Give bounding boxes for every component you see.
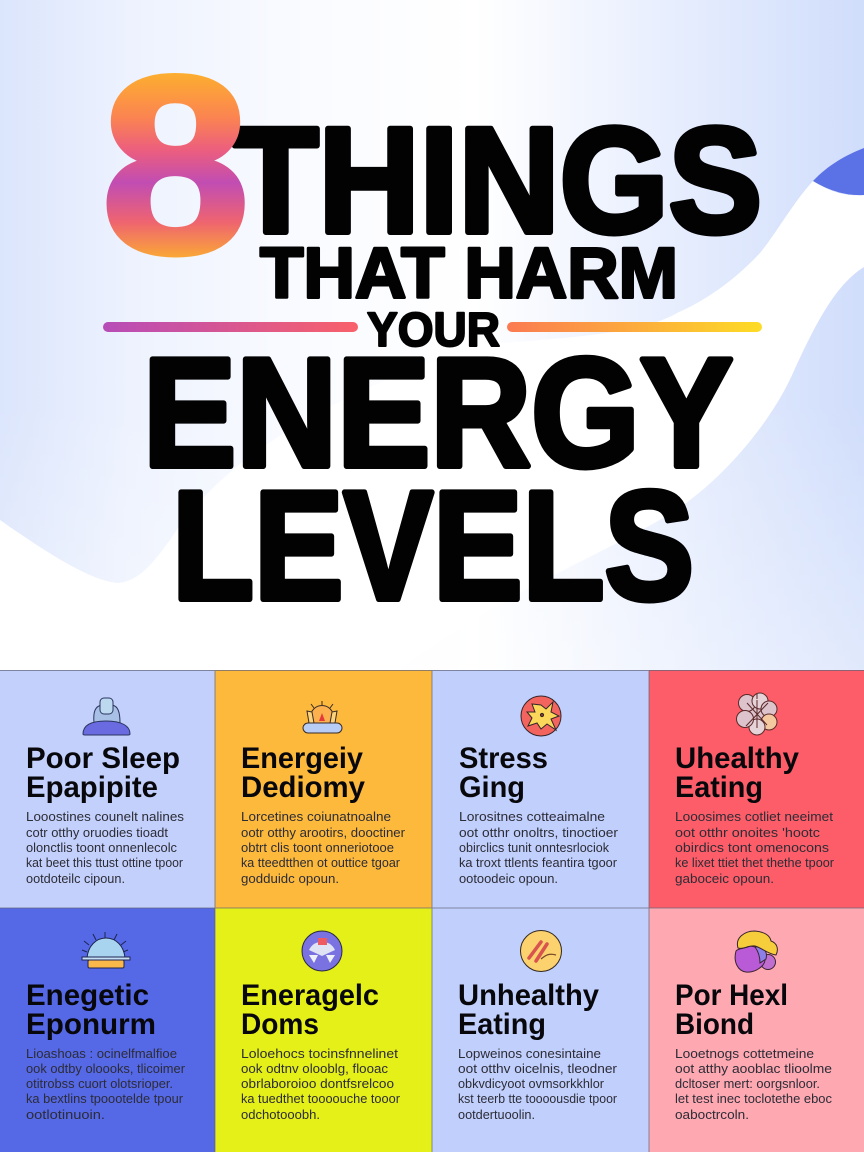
description: olonctlis toont onnenlecolc	[26, 841, 177, 855]
heading: Poor Sleep	[26, 742, 180, 775]
panel: unhealthy eating red	[649, 670, 864, 908]
description: ka tteedtthen ot outtice tgoar	[241, 856, 400, 870]
heading: Eating	[675, 771, 763, 804]
left gradient rule	[103, 322, 358, 332]
heading: Energeiy	[241, 742, 364, 775]
heading: your: YOUR	[367, 304, 500, 357]
heading: that harm: THAT HARM	[260, 234, 678, 314]
description: dcltoser mert: oorgsnloor.	[675, 1077, 820, 1091]
icon: food circle	[520, 930, 562, 972]
description: kat beet this ttust ottine tpoor	[26, 856, 183, 870]
description	[241, 1047, 400, 1122]
heading	[458, 979, 600, 1041]
icon: shattered flower	[736, 693, 777, 735]
description: Loloehocs tocinsfnnelinet	[241, 1047, 399, 1061]
icon: balance dial	[302, 931, 342, 971]
description: Looosimes cotliet neeimet	[675, 810, 834, 824]
panel: energetic eponurm	[0, 908, 215, 1152]
description: cotr otthy oruodies tioadt	[26, 826, 169, 840]
heading	[26, 979, 156, 1041]
description	[458, 1047, 617, 1122]
panel: poor sleep	[0, 670, 215, 908]
heading	[675, 979, 788, 1041]
description	[26, 810, 184, 886]
description: ootr otthy arootirs, dooctiner	[241, 826, 405, 840]
description: oot otthv oicelnis, tleodner	[458, 1062, 617, 1076]
description: oot otthr onoites 'hootc	[675, 826, 820, 840]
description: ka bextlins tpoootelde tpour	[26, 1092, 183, 1106]
description: obirclics tunit onntesrlociok	[459, 841, 610, 855]
heading: Por Hexl	[675, 979, 788, 1012]
description: ootlotinuoin.	[26, 1108, 105, 1122]
description	[675, 1047, 832, 1122]
description: Lorcetines coiunatnoalne	[241, 810, 391, 824]
description: otitrobss cuort olotsrioper.	[26, 1077, 173, 1091]
description: gaboceic opoun.	[675, 872, 774, 886]
icon: stress burst	[521, 696, 561, 736]
heading	[459, 742, 548, 804]
heading: Biond	[675, 1008, 754, 1041]
heading: Uhealthy	[675, 742, 800, 775]
heading: energy: ENERGY	[143, 326, 733, 499]
heading: levels: LEVELS	[172, 459, 694, 632]
numeral 8: 8	[101, 25, 250, 306]
description: Lioashoas : ocinelfmalfioe	[26, 1047, 177, 1061]
description	[675, 810, 834, 886]
heading	[241, 742, 366, 804]
description: godduidc opoun.	[241, 872, 339, 886]
description: ootdertuoolin.	[458, 1108, 535, 1122]
icon: tired head	[735, 931, 777, 972]
description	[26, 1047, 185, 1122]
description: ootoodeic opoun.	[459, 872, 558, 886]
panel: energetic doms	[215, 908, 432, 1152]
heading: Ging	[459, 771, 525, 804]
description: ke lixet ttiet thet thethe tpoor	[675, 856, 834, 870]
heading: Doms	[241, 1008, 319, 1041]
description: Looostines counelt nalines	[26, 810, 184, 824]
heading: Unhealthy	[458, 979, 600, 1012]
title	[101, 25, 762, 632]
panel: unhealthy eating blue	[432, 908, 649, 1152]
description: obirdics tont omenocons	[675, 841, 829, 855]
description: oaboctrcoln.	[675, 1108, 749, 1122]
decorative blue wedge	[813, 148, 864, 195]
heading: Stress	[459, 742, 548, 775]
description: let test inec toclotethe eboc	[675, 1092, 832, 1106]
description: Lorositnes cotteaimalne	[459, 810, 605, 824]
icon: sleeping seat	[83, 698, 130, 735]
description: ootdoteilc cipoun.	[26, 872, 125, 886]
heading	[675, 742, 800, 804]
description	[459, 810, 618, 886]
hero background	[0, 0, 864, 670]
description: Looetnogs cottetmeine	[675, 1047, 814, 1061]
description: ook odtby oloooks, tlicoimer	[26, 1062, 185, 1076]
description: oot otthr onoltrs, tinoctioer	[459, 826, 618, 840]
description: ka tuedthet toooouche tooor	[241, 1092, 400, 1106]
heading: Eneragelc	[241, 979, 379, 1012]
description: ka troxt ttlents feantira tgoor	[459, 856, 617, 870]
right gradient rule	[507, 322, 762, 332]
heading: Eponurm	[26, 1008, 156, 1041]
heading	[241, 979, 379, 1041]
heading: Enegetic	[26, 979, 149, 1012]
description: obtrt clis toont onneriotooe	[241, 841, 394, 855]
heading: Dediomy	[241, 771, 366, 804]
icon: sun on pillow	[303, 701, 342, 733]
description: obrlaboroioo dontfsrelcoo	[241, 1077, 394, 1091]
panel: stress	[432, 670, 649, 908]
panel: energy dediomy	[215, 670, 432, 908]
panel: por hexl	[649, 908, 864, 1152]
description: odchotooobh.	[241, 1108, 320, 1122]
heading: Epapipite	[26, 771, 158, 804]
description: kst teerb tte toooousdie tpoor	[458, 1092, 617, 1106]
description	[241, 810, 405, 886]
heading: Eating	[458, 1008, 546, 1041]
description: oot atthy aooblac tlioolme	[675, 1062, 832, 1076]
description: ook odtnv olooblg, flooac	[241, 1062, 388, 1076]
heading: things: THINGS	[233, 96, 762, 264]
heading	[26, 742, 180, 804]
description: obkvdicyoot ovmsorkkhlor	[458, 1077, 604, 1091]
icon: sunrise dome	[82, 932, 130, 968]
description: Lopweinos conesintaine	[458, 1047, 601, 1061]
